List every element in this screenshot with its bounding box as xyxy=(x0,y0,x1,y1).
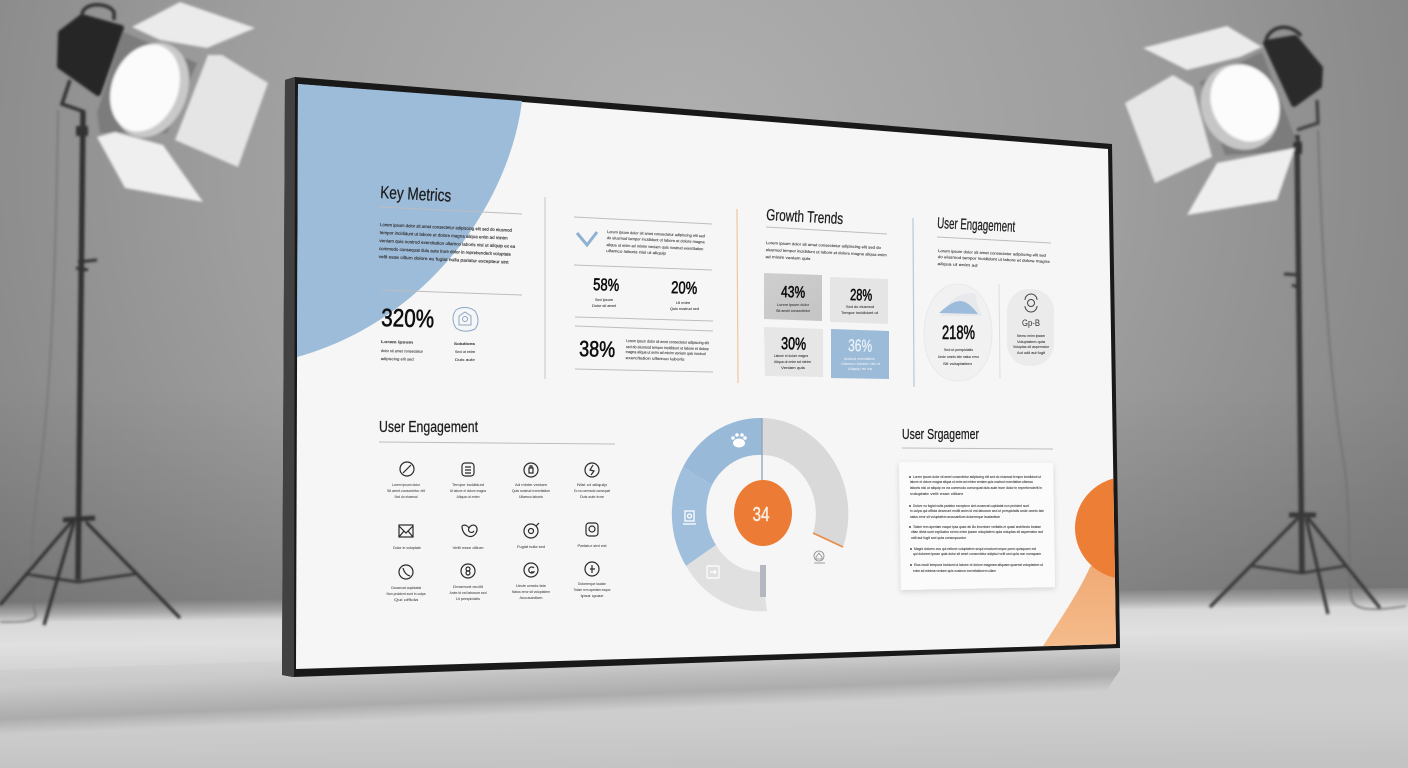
panel: summary stats xyxy=(574,217,713,372)
item: number circle: Anim id est laborum sed xyxy=(450,591,486,595)
item: g circle: Accusantium xyxy=(520,596,543,600)
tile: 30%: Labore et dolore magna xyxy=(774,354,809,358)
icon: home label xyxy=(814,551,825,563)
left tripod stand xyxy=(0,112,180,625)
item: pencil circle xyxy=(387,462,425,499)
stat 20% caption xyxy=(670,301,699,311)
tile: 28% xyxy=(830,277,888,324)
item: number circle: Ut perspiciatis xyxy=(456,597,480,601)
summary paragraph: aliqua ut enim ad minim veniam quis nostrud exercitation xyxy=(606,243,703,251)
item: phone: Non proident sunt in culpa xyxy=(386,592,426,596)
engagement card with dome xyxy=(924,284,992,381)
tile: 43%: Lorem ipsum dolor xyxy=(777,303,810,307)
heading: user engagement: User Engagement xyxy=(937,215,1016,236)
item: lock circle: Quis nostrud exercitation xyxy=(512,489,550,493)
stat 58% caption: Sed ipsum xyxy=(595,298,613,302)
item: target: Fugiat nulla sed xyxy=(517,545,545,549)
engagement pill card: Voluptas sit aspernatur xyxy=(1013,345,1050,349)
tile: 28%: Tempor incididunt ut xyxy=(841,311,879,315)
engagement pill card: Nemo enim ipsam xyxy=(1017,334,1045,338)
stat: 58%: 58% xyxy=(593,275,620,295)
summary paragraph: Lorem ipsum dolor sit amet consectetur adipiscing elit sed xyxy=(607,230,705,238)
growth paragraph xyxy=(765,241,887,264)
tile: 36% xyxy=(831,329,889,379)
bullet five: enim ad minima veniam quis nostrum exercitationem ullam xyxy=(913,569,996,573)
stat 38% paragraph: exercitation ullamco laboris xyxy=(626,356,685,362)
item: plus circle: Totam rem aperiam eaque xyxy=(574,588,610,592)
item: lock circle: Ad minim veniam xyxy=(515,483,547,487)
stat 320% caption: dolor sit amet consectetur xyxy=(381,349,424,354)
item: pencil circle: Sit amet consectetur elit xyxy=(387,489,425,493)
bullet five xyxy=(910,563,1044,573)
stat 58% caption: Dolor sit amet xyxy=(592,304,617,308)
summary paragraph: do eiusmod tempor incididunt ut labore et dolore magna xyxy=(607,236,706,244)
segment: blue left xyxy=(672,467,716,566)
stat 20% caption: Quis nostrud sed xyxy=(670,307,699,311)
item: document: Tempor incididunt xyxy=(452,483,484,487)
item: pencil circle: Sed do eiusmod xyxy=(394,495,418,499)
panel: engagement notes xyxy=(899,426,1055,590)
stat 20% caption: Ut enim xyxy=(676,301,690,305)
engagement pill card: Aut odit aut fugit xyxy=(1017,351,1046,355)
left studio light xyxy=(0,2,268,625)
item: bolt circle: Nisi ut aliquip xyxy=(577,483,607,487)
heading: growth trends: Growth Trends xyxy=(766,207,844,228)
screen background xyxy=(296,84,1116,669)
badge caption: Solutions xyxy=(454,342,475,346)
heading: user engagement grid: User Engagement xyxy=(379,419,479,436)
growth paragraph: ad minim veniam quis xyxy=(765,255,811,261)
item: target xyxy=(517,523,545,549)
tile: 36%: Nostrud exercitation xyxy=(844,357,875,361)
heading: key metrics: Key Metrics xyxy=(380,182,452,206)
item: number circle: Deserunt mollit xyxy=(453,585,483,589)
bullet three: Totam rem aperiam eaque ipsa quae ab illo inventore veritatis et quasi architecto beatae xyxy=(913,525,1041,529)
engagement card with dome: Sed ut perspiciatis xyxy=(944,348,973,352)
item: bolt circle: Duis aute irure xyxy=(580,495,604,499)
item: bolt circle: Ex ea commodo consequat xyxy=(574,489,610,493)
icon: badge xyxy=(683,511,696,524)
item: plus circle: Ipsa quae xyxy=(580,594,604,598)
item: document: Ut labore et dolore magna xyxy=(450,489,486,493)
bullet three: odit aut fugit sed quia consequuntur xyxy=(911,536,967,540)
panel: engagement icon grid xyxy=(379,419,615,602)
panel: growth trends xyxy=(764,207,889,379)
tile: 28%: Sed do eiusmod xyxy=(846,305,874,309)
item: g circle xyxy=(512,563,550,600)
stat 38% paragraph xyxy=(626,339,710,362)
stat: 320%: 320% xyxy=(381,304,435,333)
summary paragraph xyxy=(606,230,706,257)
segment: blue top xyxy=(683,418,762,485)
bullet two: Dolore eu fugiat nulla pariatur excepteur sint occaecat cupidatat non proident sunt xyxy=(913,504,1030,508)
stat 38% paragraph: sed do eiusmod tempor incididunt ut labore et dolore xyxy=(626,345,709,351)
tile: 28%: 28% xyxy=(850,287,872,305)
key metrics paragraph: tempor incididunt ut labore et dolore magna aliqua enim ad minim xyxy=(380,230,508,241)
left lamp body xyxy=(60,5,197,136)
segment: grey bottom xyxy=(686,545,767,611)
bullet one: laboris nisi ut aliquip ex ea commodo consequat duis aute irure dolor in reprehenderit in xyxy=(910,486,1042,490)
stat 58% caption xyxy=(592,298,617,308)
display frame xyxy=(282,77,1120,677)
right studio light xyxy=(1125,26,1406,614)
item: g circle: Natus error sit voluptatem xyxy=(512,590,550,594)
item: number circle xyxy=(450,564,486,601)
tile: 36%: 36% xyxy=(848,336,872,356)
orange corner shapes xyxy=(1043,478,1116,646)
key metrics paragraph: commodo consequat duis aute irure dolor in reprehenderit voluptate xyxy=(379,246,512,257)
item: phone: Qui officia xyxy=(394,598,418,602)
bullet three xyxy=(909,525,1044,540)
right lamp body xyxy=(1200,27,1320,155)
item: bolt circle xyxy=(574,463,610,499)
engagement paragraph: Lorem ipsum dolor sit amet consectetur adipiscing elit sed xyxy=(938,249,1046,258)
engagement paragraph: do eiusmod tempor incididunt ut labore et dolore magna xyxy=(938,255,1051,264)
item: at sign: Pariatur sint est xyxy=(578,544,606,548)
item: document: Aliqua ut enim xyxy=(456,495,480,499)
bullet one: voluptate velit esse cillum xyxy=(910,492,963,496)
icon: square xyxy=(707,566,719,578)
item: phone: Occaecat cupidatat xyxy=(391,586,421,590)
icon: check mark xyxy=(577,232,597,245)
engagement pill card: Gp-B xyxy=(1022,318,1040,328)
bullet two xyxy=(909,504,1044,519)
item: pencil circle: Lorem ipsum dolor xyxy=(392,483,421,487)
tile: 43% xyxy=(764,273,822,321)
bullet four: Magni dolores eos qui ratione voluptatem sequi nesciunt neque porro quisquam est xyxy=(914,547,1037,551)
icon: circular arrows xyxy=(1025,294,1037,312)
icon: paw xyxy=(731,433,747,448)
item: swirl: Velit esse cillum xyxy=(452,546,484,550)
tile: 30%: 30% xyxy=(781,334,806,354)
engagement paragraph xyxy=(937,249,1051,271)
panel: key metrics xyxy=(379,182,522,362)
left barn door flaps xyxy=(97,2,268,202)
heading: user engagement notes: User Srgagemer xyxy=(902,426,979,443)
tile: 36%: Ullamco laboris nisi ut xyxy=(841,362,880,366)
tile: 43%: 43% xyxy=(781,284,805,302)
engagement card with dome: 218% xyxy=(942,323,975,344)
item: mail: Dolor in voluptate xyxy=(393,546,421,550)
right light cable xyxy=(1318,130,1406,609)
stat 320% caption: adipiscing elit sed xyxy=(381,357,414,362)
segment: grey right xyxy=(762,418,848,547)
screen floor shadow xyxy=(0,635,1120,745)
item: plus circle xyxy=(574,562,610,598)
item: at sign xyxy=(578,523,606,548)
item: lock circle: Ullamco laboris xyxy=(519,495,543,499)
key metrics paragraph: Lorem ipsum dolor sit amet consectetur adipiscing elit sed do eiusmod xyxy=(380,222,513,233)
item: phone xyxy=(386,565,426,602)
display screen xyxy=(296,84,1177,669)
key metrics paragraph xyxy=(379,222,517,265)
centre value xyxy=(734,480,792,546)
bullet one xyxy=(909,475,1042,496)
bullet four: qui dolorem ipsum quia dolor sit amet consectetur adipisci velit sed quia non numquam xyxy=(913,552,1041,556)
summary paragraph: ullamco laboris nisi ut aliquip xyxy=(606,249,666,256)
left lamp lens xyxy=(98,31,203,149)
studio floor xyxy=(0,588,1408,768)
stat 38% paragraph: Lorem ipsum dolor sit amet consectetur adipiscing elit xyxy=(626,339,710,345)
bullet two: natus error sit voluptatem accusantium doloremque laudantium xyxy=(910,515,1000,519)
key metrics paragraph: veniam quis nostrud exercitation ullamco laboris nisi ut aliquip ex ea xyxy=(379,238,516,249)
item: mail xyxy=(393,525,421,550)
bullet three: vitae dicta sunt explicabo nemo enim ipsam voluptatem quia voluptas sit aspernatur aut xyxy=(911,530,1044,534)
bullet two: in culpa qui officia deserunt mollit anim id est laborum sed ut perspiciatis unde omnis iste xyxy=(910,509,1044,513)
key metrics paragraph: velit esse cillum dolore eu fugiat nulla pariatur excepteur sint xyxy=(379,254,510,265)
right barn door flaps xyxy=(1125,26,1295,215)
stat: 38%: 38% xyxy=(579,336,616,362)
bullet one: Lorem ipsum dolor sit amet consectetur adipiscing elit sed do eiusmod tempor incididunt ut xyxy=(913,475,1042,479)
item: g circle: Unde omnis iste xyxy=(516,584,546,588)
grey marker bar xyxy=(760,565,766,597)
orange segment tick xyxy=(813,533,843,547)
tile: 43%: Sit amet consectetur xyxy=(776,309,811,313)
bullet four xyxy=(910,547,1041,556)
item: lock circle xyxy=(512,463,550,499)
tile: 36%: Aliquip ex ea xyxy=(848,367,872,371)
growth paragraph: Lorem ipsum dolor sit amet consectetur adipiscing elit sed do xyxy=(766,241,881,250)
engagement pill card: Voluptatem quia xyxy=(1017,340,1046,344)
stat: 20%: 20% xyxy=(671,278,698,298)
notes card xyxy=(899,462,1055,590)
badge caption xyxy=(454,342,475,362)
tile: 30% xyxy=(764,327,823,377)
bullet five: Eius modi tempora incidunt ut labore et dolore magnam aliquam quaerat voluptatem ut xyxy=(914,563,1044,567)
bullet one: labore et dolore magna aliqua ut enim ad minim veniam quis nostrud exercitation ullamco xyxy=(910,480,1033,484)
centre value: 34 xyxy=(752,504,770,526)
donut chart xyxy=(672,418,848,611)
engagement paragraph: aliqua ut enim ad xyxy=(937,262,978,268)
engagement card with dome: Unde omnis iste natus error xyxy=(938,355,980,359)
left light cable xyxy=(0,110,58,622)
growth paragraph: eiusmod tempor incididunt ut labore et dolore magna aliqua enim xyxy=(766,248,887,257)
stat 38% paragraph: magna aliqua ut enim ad minim veniam quis nostrud xyxy=(626,350,706,356)
right lamp lens xyxy=(1186,50,1294,164)
engagement pill card xyxy=(1007,289,1054,366)
stat 320% caption xyxy=(381,340,424,362)
item: plus circle: Doloremque laudan xyxy=(578,582,606,586)
tile: 30%: Aliqua ut enim ad minim xyxy=(774,360,811,364)
blue corner shape xyxy=(297,84,522,357)
panel: user engagement top xyxy=(924,215,1054,381)
item: document xyxy=(450,463,486,499)
badge caption: Sed ut enim xyxy=(455,350,475,354)
icon: engagement badge xyxy=(453,307,478,331)
tile: 30%: Veniam quis xyxy=(781,366,805,370)
engagement card with dome: Sit voluptatem xyxy=(943,362,972,366)
badge caption: Duis aute xyxy=(455,358,475,362)
stat 320% caption: Lorem ipsum xyxy=(381,340,414,345)
right tripod stand xyxy=(1210,135,1380,614)
item: swirl xyxy=(452,525,484,550)
